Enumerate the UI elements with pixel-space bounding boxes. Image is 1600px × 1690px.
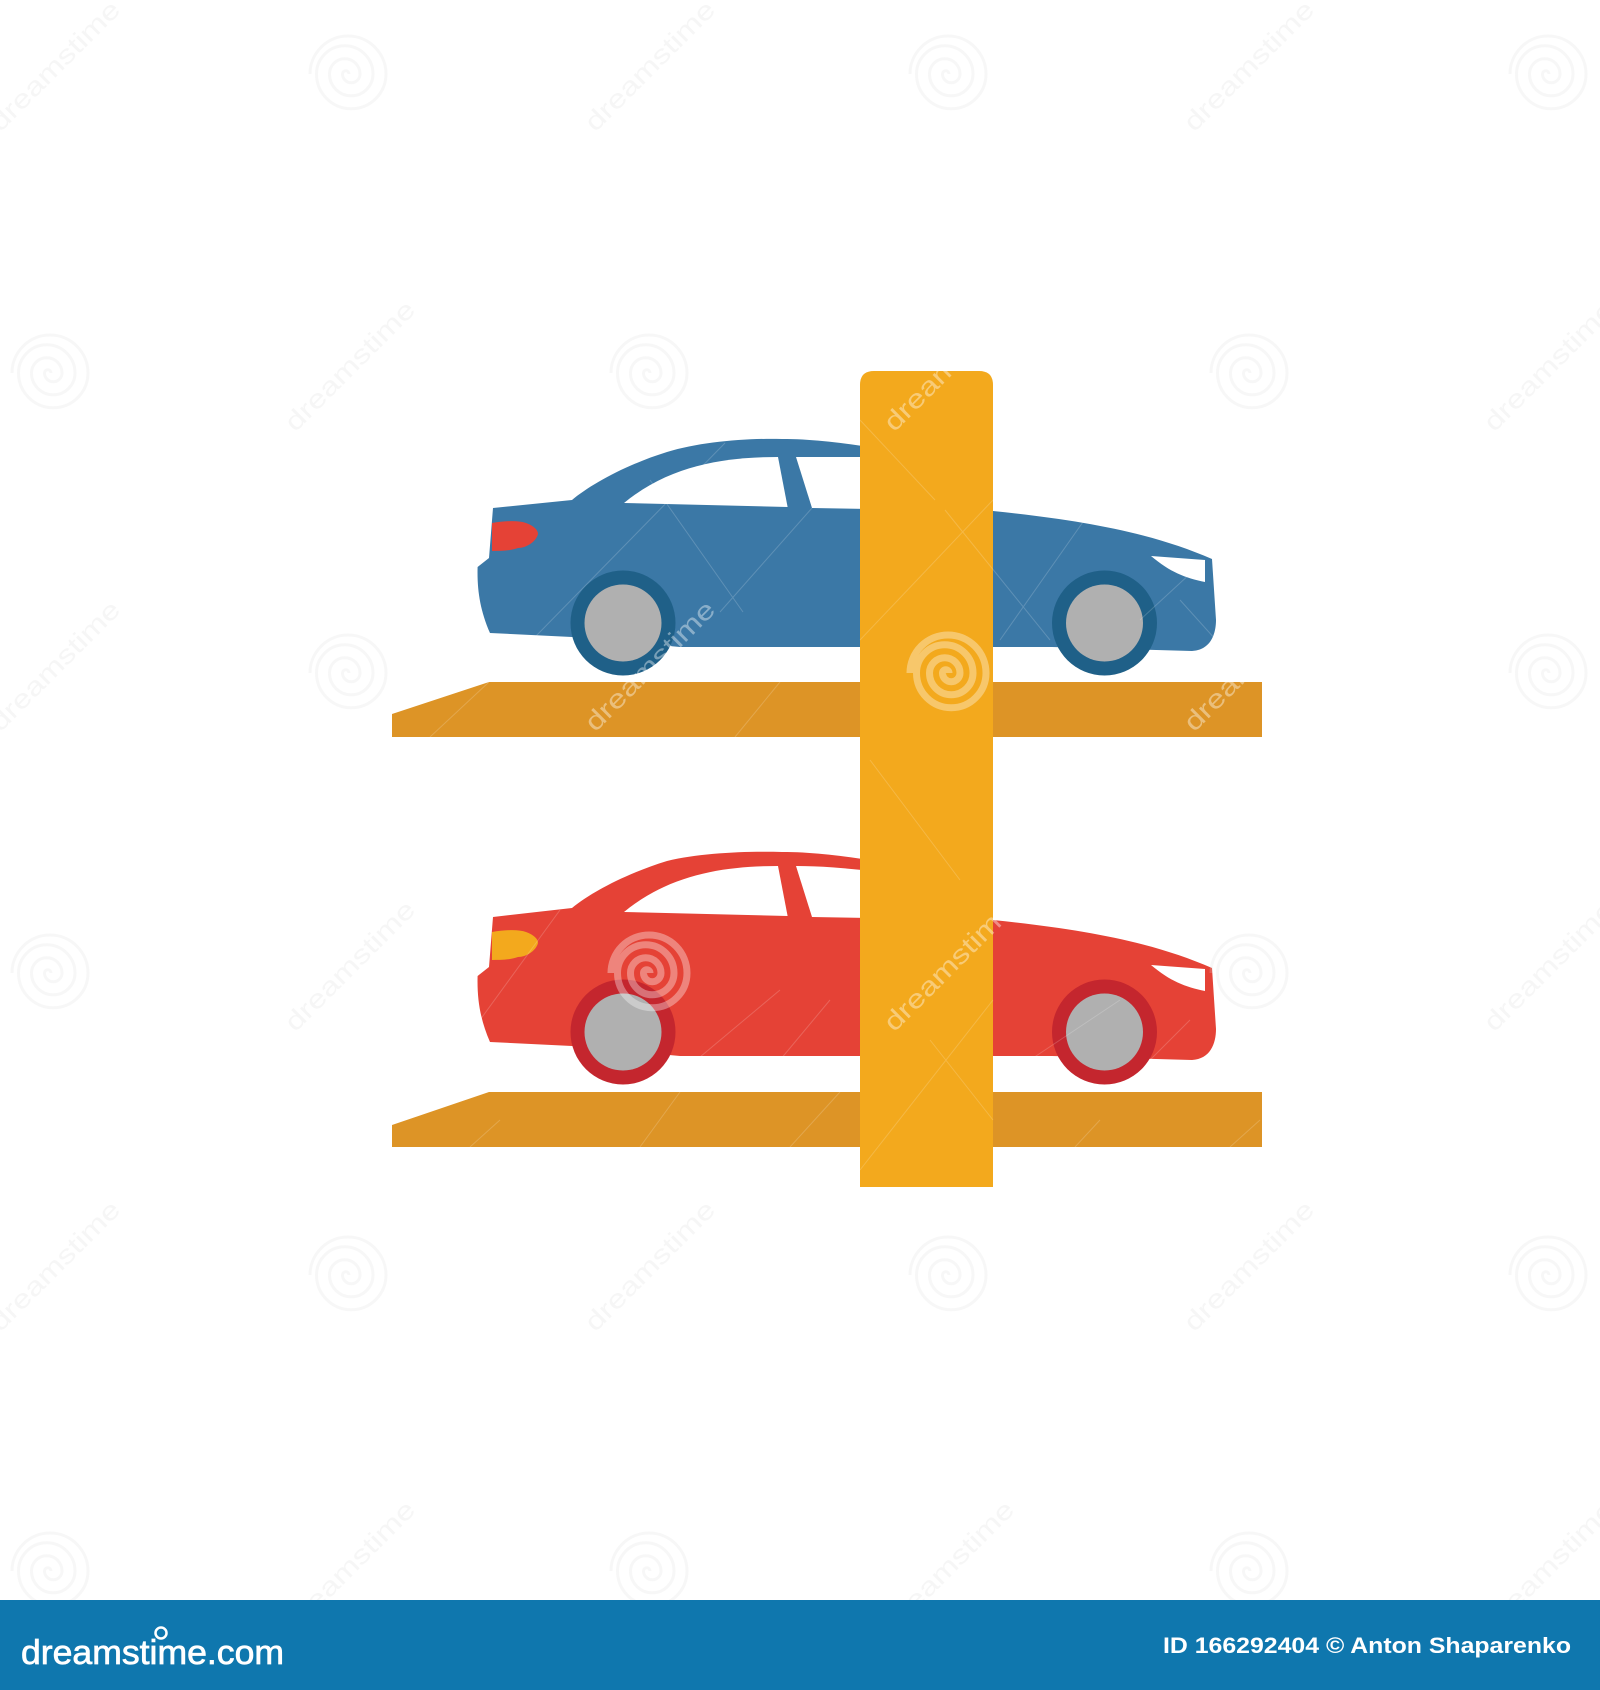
watermark wordmarks: dreamstime [1177, 0, 1320, 137]
red car headlight [1151, 965, 1205, 991]
blue car tail light [492, 521, 538, 551]
red car body [478, 852, 1216, 1060]
red car rear window [624, 866, 788, 916]
watermark wordmarks: dreamstime [1477, 894, 1600, 1037]
blue car rear window [624, 457, 788, 507]
red car tail light [492, 930, 538, 960]
blue car front window [796, 457, 870, 509]
watermark wordmarks: dreamstime [278, 294, 421, 437]
central lift column [860, 371, 993, 1187]
watermark wordmarks: dreamstime [1177, 1194, 1320, 1337]
watermark wordmarks: dreamstime [877, 894, 1020, 1037]
watermark wordmarks: dreamstime [578, 1194, 721, 1337]
image id and author credit: ID 166292404 © Anton Shaparenko [1163, 1633, 1571, 1658]
blue car headlight [1151, 556, 1205, 582]
blue car on upper level [478, 439, 1216, 676]
watermark wordmarks: dreamstime [1477, 294, 1600, 437]
watermark wordmarks: dreamstime [578, 0, 721, 137]
logo spiral [156, 1628, 166, 1638]
watermark wordmarks: dreamstime [278, 1494, 421, 1637]
footer bar [0, 1600, 1600, 1690]
watermark wordmarks: dreamstime [278, 894, 421, 1037]
blue car rear wheel [570, 570, 676, 676]
red car front window [796, 866, 870, 918]
watermark wordmarks: dreamstime [578, 594, 721, 737]
red car on lower level [478, 852, 1216, 1084]
blue car body [478, 439, 1216, 651]
red car front wheel [1052, 980, 1157, 1084]
blue car front wheel [1052, 570, 1157, 676]
parking ramp: upper [392, 682, 1262, 737]
watermark wordmarks: dreamstime [1477, 1494, 1600, 1637]
watermark wordmarks: dreamstime [877, 294, 1020, 437]
watermark wordmarks: dreamstime [877, 1494, 1020, 1637]
watermark wordmarks: dreamstime [1177, 594, 1320, 737]
footer logo: dreamstime.com [21, 1634, 284, 1672]
parking ramp: lower [392, 1092, 1262, 1147]
red car rear wheel [570, 980, 676, 1084]
